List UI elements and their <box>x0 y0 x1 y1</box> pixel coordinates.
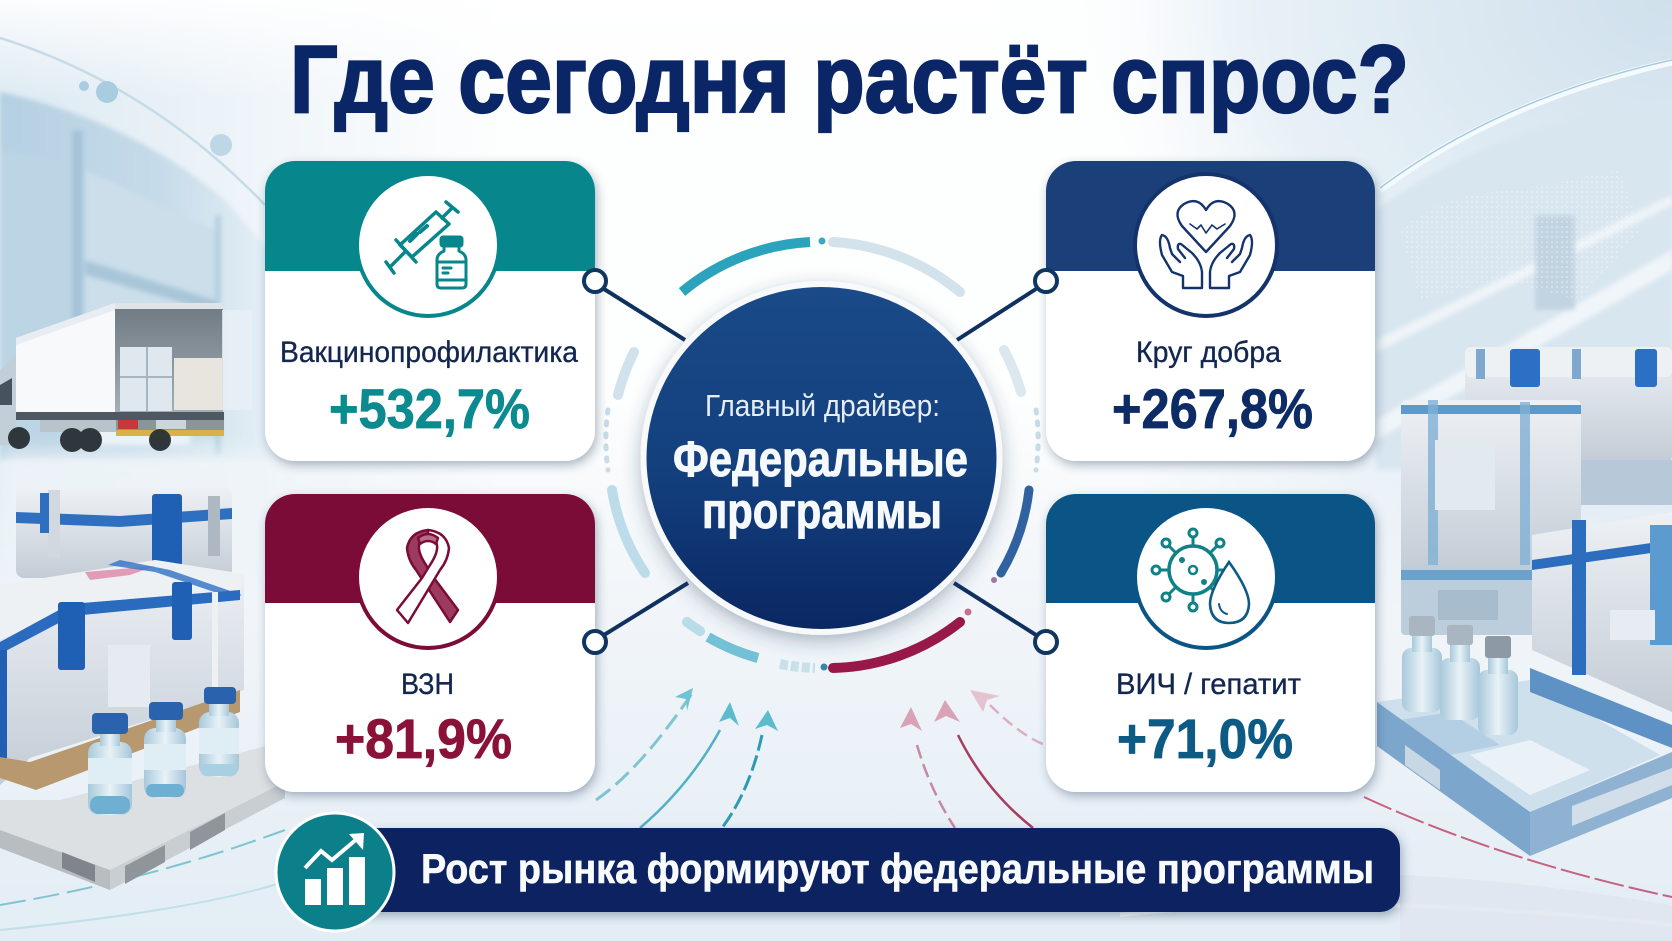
background: warehouse right with world map <box>1376 60 1672 470</box>
label: ВИЧ / гепатит <box>1116 668 1301 701</box>
background: truck <box>0 303 252 452</box>
icon: ribbon <box>397 530 458 623</box>
panel: Вакцинопрофилактика <box>265 161 595 461</box>
background: warehouse left <box>0 92 268 460</box>
central driver circle <box>640 281 1002 635</box>
icon: growth chart <box>276 813 394 931</box>
panel: Круг добра <box>1046 161 1375 461</box>
icon: heart in hands <box>1160 201 1252 288</box>
driver heading: программы <box>702 483 942 539</box>
background: cooler boxes left <box>0 488 244 785</box>
panel: ВИЧ / гепатит <box>1046 494 1375 792</box>
connector: top left <box>604 289 685 340</box>
icon: syringe and vial <box>386 202 466 288</box>
ring segments around driver circle <box>606 238 1038 670</box>
label: Круг добра <box>1136 336 1281 369</box>
value: +267,8% <box>1112 377 1313 440</box>
background: floor light paths <box>0 692 1672 930</box>
bottom banner <box>276 813 1400 931</box>
panel: ВЗН <box>265 494 595 792</box>
background: ring line with dots, left <box>0 38 265 205</box>
connector node: top left <box>584 270 606 292</box>
connector: bottom left <box>604 583 688 635</box>
connector: bottom right <box>954 583 1036 635</box>
label: Вакцинопрофилактика <box>280 336 578 369</box>
driver heading <box>673 431 968 539</box>
connector: top right <box>957 289 1036 340</box>
growth arrows: crimson <box>900 690 1045 828</box>
connector node: top right <box>1035 270 1057 292</box>
driver subtitle: Главный драйвер: <box>705 388 940 423</box>
label: ВЗН <box>401 668 454 701</box>
value: +81,9% <box>335 707 512 770</box>
connector node: bottom right <box>1035 631 1057 653</box>
background: floor pale left <box>0 450 268 570</box>
background: cooler boxes right <box>1401 347 1672 712</box>
background: vials left <box>88 687 239 815</box>
value: +71,0% <box>1117 707 1293 770</box>
driver heading: Федеральные <box>673 431 968 487</box>
value: +532,7% <box>329 377 530 440</box>
icon: virus and drop <box>1152 529 1249 623</box>
title: Где сегодня растёт спрос? <box>290 26 1409 133</box>
connector node: bottom left <box>584 631 606 653</box>
background: vials right <box>1402 616 1518 735</box>
banner text: Рост рынка формируют федеральные программы <box>421 845 1374 892</box>
growth arrows: teal <box>640 688 778 828</box>
background: blue pallet right <box>1377 668 1672 941</box>
background: pallets left <box>0 690 285 890</box>
